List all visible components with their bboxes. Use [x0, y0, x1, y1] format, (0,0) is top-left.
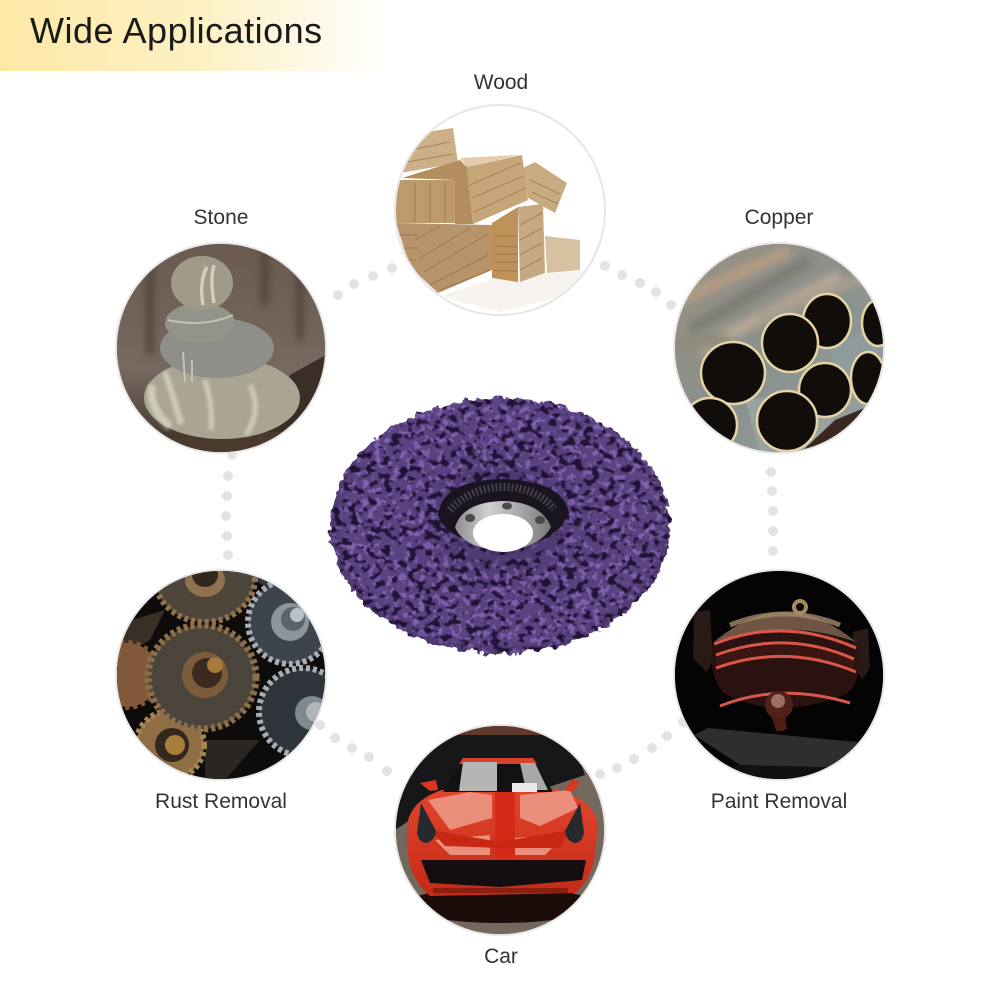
central gear [148, 625, 256, 729]
hood highlights [428, 790, 578, 855]
photo: rusty gears [115, 569, 327, 781]
top gear [156, 571, 258, 625]
header banner [0, 0, 390, 71]
label: car: Car [484, 945, 518, 968]
disc body [328, 396, 672, 656]
photo: wood blocks [395, 105, 605, 315]
product: purple abrasive disc [328, 396, 672, 656]
label: stone: Stone [194, 206, 248, 229]
dotted connector ring [221, 261, 778, 779]
photo: stacked stone [116, 243, 326, 454]
label: wood: Wood [474, 71, 528, 94]
steel gear bottom right [256, 665, 325, 756]
label: copper: Copper [745, 206, 813, 229]
metal hub [438, 479, 569, 559]
photo: red sports car [395, 725, 605, 935]
title: Wide Applications [30, 10, 323, 51]
photo: copper pipes [674, 243, 894, 453]
label: rust removal: Rust Removal [155, 790, 287, 813]
photo: lacquered vessel [674, 570, 884, 780]
steel gear top right [248, 580, 332, 664]
bottom rust gear [136, 711, 204, 779]
left rust gear [117, 640, 153, 710]
label: paint removal: Paint Removal [711, 790, 847, 813]
